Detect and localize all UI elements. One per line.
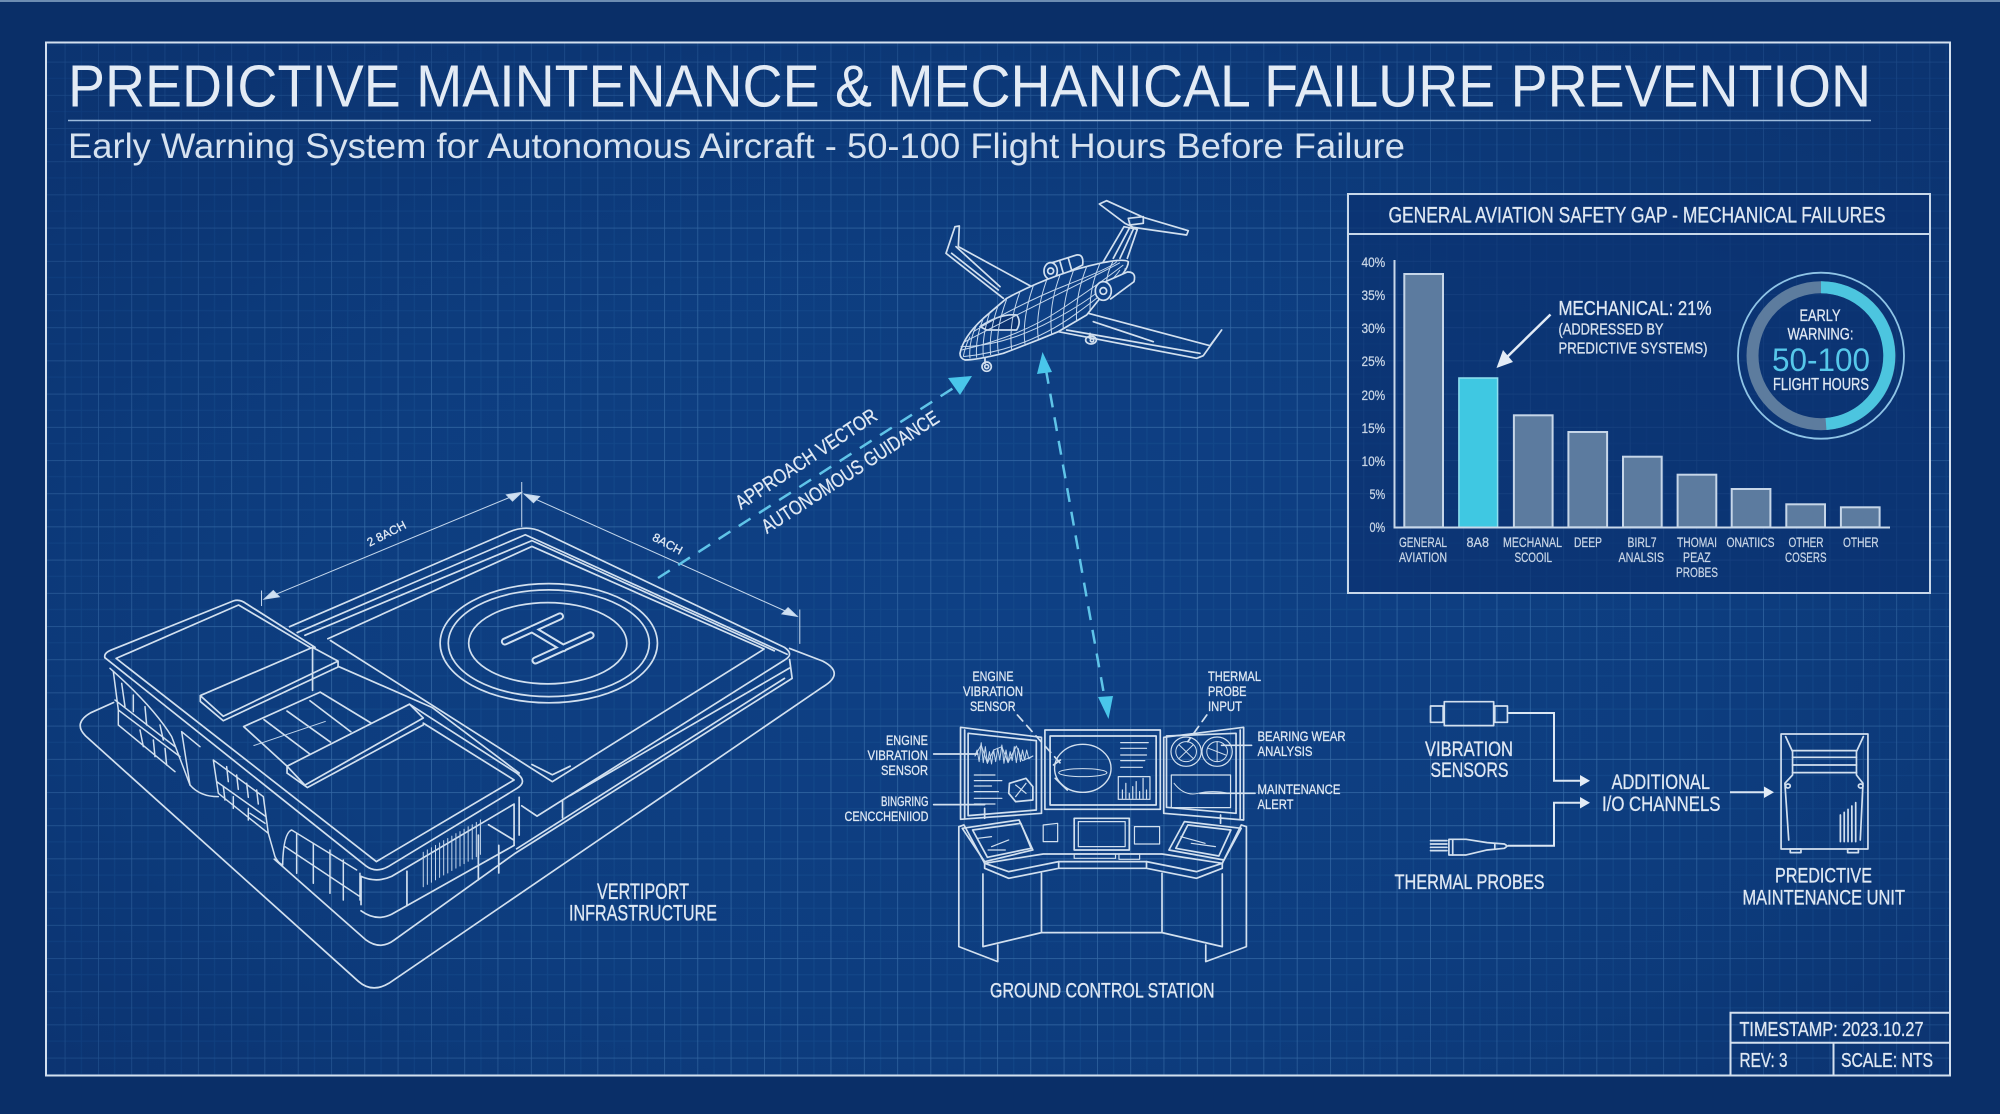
chart heading: GENERAL AVIATION SAFETY GAP - MECHANICAL FAILURES [1388,202,1886,228]
ground control station [934,715,1255,962]
x axis labels: AVIATION [1399,549,1447,565]
y axis labels: 20% [1362,387,1385,403]
base plate [80,648,834,988]
console label: left engine vibration sensor: SENSOR [881,762,928,778]
y axis labels: 40% [1362,254,1385,270]
x axis labels: MECHANAL [1503,534,1562,550]
label: vibration sensors [1425,738,1513,782]
label: infrastructure: INFRASTRUCTURE [569,900,717,926]
x axis labels: PEAZ [1683,549,1711,565]
console label: maintenance alert [1258,781,1340,812]
dashed arrow: approach vector [658,376,972,578]
console label: maintenance alert: MAINTENANCE [1258,781,1340,797]
top engine [1044,255,1083,279]
x axis labels: GENERAL [1399,534,1447,550]
x axis labels: THOMAI [1677,534,1717,550]
drawing title block [1730,1013,1950,1075]
callout: mechanical 21%: PREDICTIVE SYSTEMS) [1558,340,1708,358]
console label: bearing condition [844,793,928,824]
helipad deck [290,528,790,849]
console label: thermal probe input: THERMAL [1208,668,1261,684]
x axis labels [1399,534,1879,580]
console label: bearing wear analysis: BEARING WEAR [1258,728,1346,744]
label: predictive maintenance unit [1742,864,1905,910]
tail [1099,201,1188,262]
control desk [959,808,1246,962]
side engine [1095,272,1135,300]
callout leader lines [934,715,1255,805]
drawing title block: SCALE: NTS [1841,1050,1933,1072]
x axis labels: DEEP [1574,534,1602,550]
icon: thermal probe [1431,839,1507,855]
label: predictive maintenance unit: PREDICTIVE [1775,864,1872,888]
early warning ring gauge: FLIGHT HOURS [1773,374,1869,394]
x axis labels: 8A8 [1466,534,1489,550]
left facade windows [110,668,360,900]
lower facade [361,797,519,917]
label: vertiport: VERTIPORT [597,879,689,904]
monitor: centre [1045,730,1160,809]
landing gear [982,333,1096,371]
icon: predictive maintenance unit [1781,734,1868,853]
console label: maintenance alert: ALERT [1258,796,1294,812]
label: vibration sensors: VIBRATION [1425,738,1513,761]
x axis labels: SCOOIL [1514,549,1552,565]
dimension lines [262,482,800,644]
early warning ring gauge [1738,273,1904,439]
x axis labels: PROBES [1676,564,1718,580]
callout: mechanical 21% [1496,298,1712,368]
monitor: right [1164,727,1244,820]
dimension text: width: 2 8ACH [365,518,408,549]
x axis labels: ONATIICS [1726,534,1774,550]
x axis labels: BIRL7 [1628,534,1657,550]
connector: sensors to I/O channels [1508,713,1590,846]
y axis labels: 35% [1362,287,1385,303]
y axis labels: 10% [1362,453,1385,469]
x axis labels: ANALSIS [1618,549,1664,565]
console label: thermal probe input: PROBE [1208,683,1246,699]
label: thermal probes: THERMAL PROBES [1394,871,1544,894]
label: predictive maintenance unit: MAINTENANCE UNIT [1742,886,1905,910]
panel: general aviation safety gap chart [1348,194,1930,593]
console label: bearing condition: CENCCHENIIOD [844,808,928,824]
drawing title block: REV: 3 [1740,1050,1788,1072]
console label: top engine vibration sensor: VIBRATION [963,683,1023,699]
early warning ring gauge: WARNING: [1788,324,1854,344]
fuselage [960,260,1128,360]
x axis labels: OTHER [1788,534,1824,550]
y axis labels: 30% [1362,320,1385,336]
vertiport infrastructure illustration [80,482,834,988]
title: PREDICTIVE MAINTENANCE & MECHANICAL FAILURE PREVENTION [68,52,1871,120]
label: ground control station: GROUND CONTROL STATION [990,980,1214,1002]
bars [1404,274,1880,527]
callout: mechanical 21%: MECHANICAL: 21% [1558,298,1712,320]
label: vibration sensors: SENSORS [1430,759,1508,782]
console label: top engine vibration sensor: ENGINE [972,668,1014,684]
y axis labels [1362,254,1385,535]
label: approach vector: APPROACH VECTOR [732,405,881,514]
console label: bearing wear analysis [1258,728,1346,759]
y axis labels: 0% [1370,519,1385,535]
console label: top engine vibration sensor [963,668,1023,714]
label: autonomous guidance: AUTONOMOUS GUIDANCE [758,407,943,538]
early warning ring gauge: EARLY [1800,306,1840,325]
label: additional I/O channels: ADDITIONAL [1612,771,1710,794]
monitor: left [961,727,1041,819]
early warning ring gauge: 50-100 [1772,342,1870,378]
y axis labels: 15% [1362,420,1385,436]
console label: bearing wear analysis: ANALYSIS [1258,743,1312,759]
wings [946,226,1222,358]
console label: thermal probe input: INPUT [1208,698,1242,714]
apron line [274,659,792,945]
console label: thermal probe input [1208,668,1261,714]
aircraft wireframe [946,201,1222,371]
y axis labels: 25% [1362,353,1385,369]
console label: top engine vibration sensor: SENSOR [970,698,1016,714]
building roof and wings [105,600,522,870]
fuselage mesh [961,261,1125,358]
dimension text: depth: 8ACH [650,530,685,558]
arrow to predictive maintenance unit [1730,786,1774,798]
y axis labels: 5% [1370,486,1385,502]
drawing title block: TIMESTAMP: 2023.10.27 [1740,1019,1924,1041]
subtitle: Early Warning System for Autonomous Aircraft - 50-100 Flight Hours Before Failure [68,127,1405,166]
dashed arrow: aircraft to ground station [1037,352,1113,719]
helipad circles and H mark [440,584,657,703]
label: additional I/O channels [1602,771,1720,816]
console label: left engine vibration sensor: VIBRATION [868,747,928,763]
console label: bearing condition: BINGRING [881,793,928,809]
x axis labels: COSERS [1785,549,1826,565]
icon: vibration sensor [1431,702,1507,726]
console label: left engine vibration sensor [868,732,928,778]
callout: mechanical 21%: (ADDRESSED BY [1558,322,1664,338]
label: additional I/O channels: I/O CHANNELS [1602,793,1720,816]
console label: left engine vibration sensor: ENGINE [886,732,928,748]
axes [1394,260,1890,528]
x axis labels: OTHER [1843,534,1879,550]
